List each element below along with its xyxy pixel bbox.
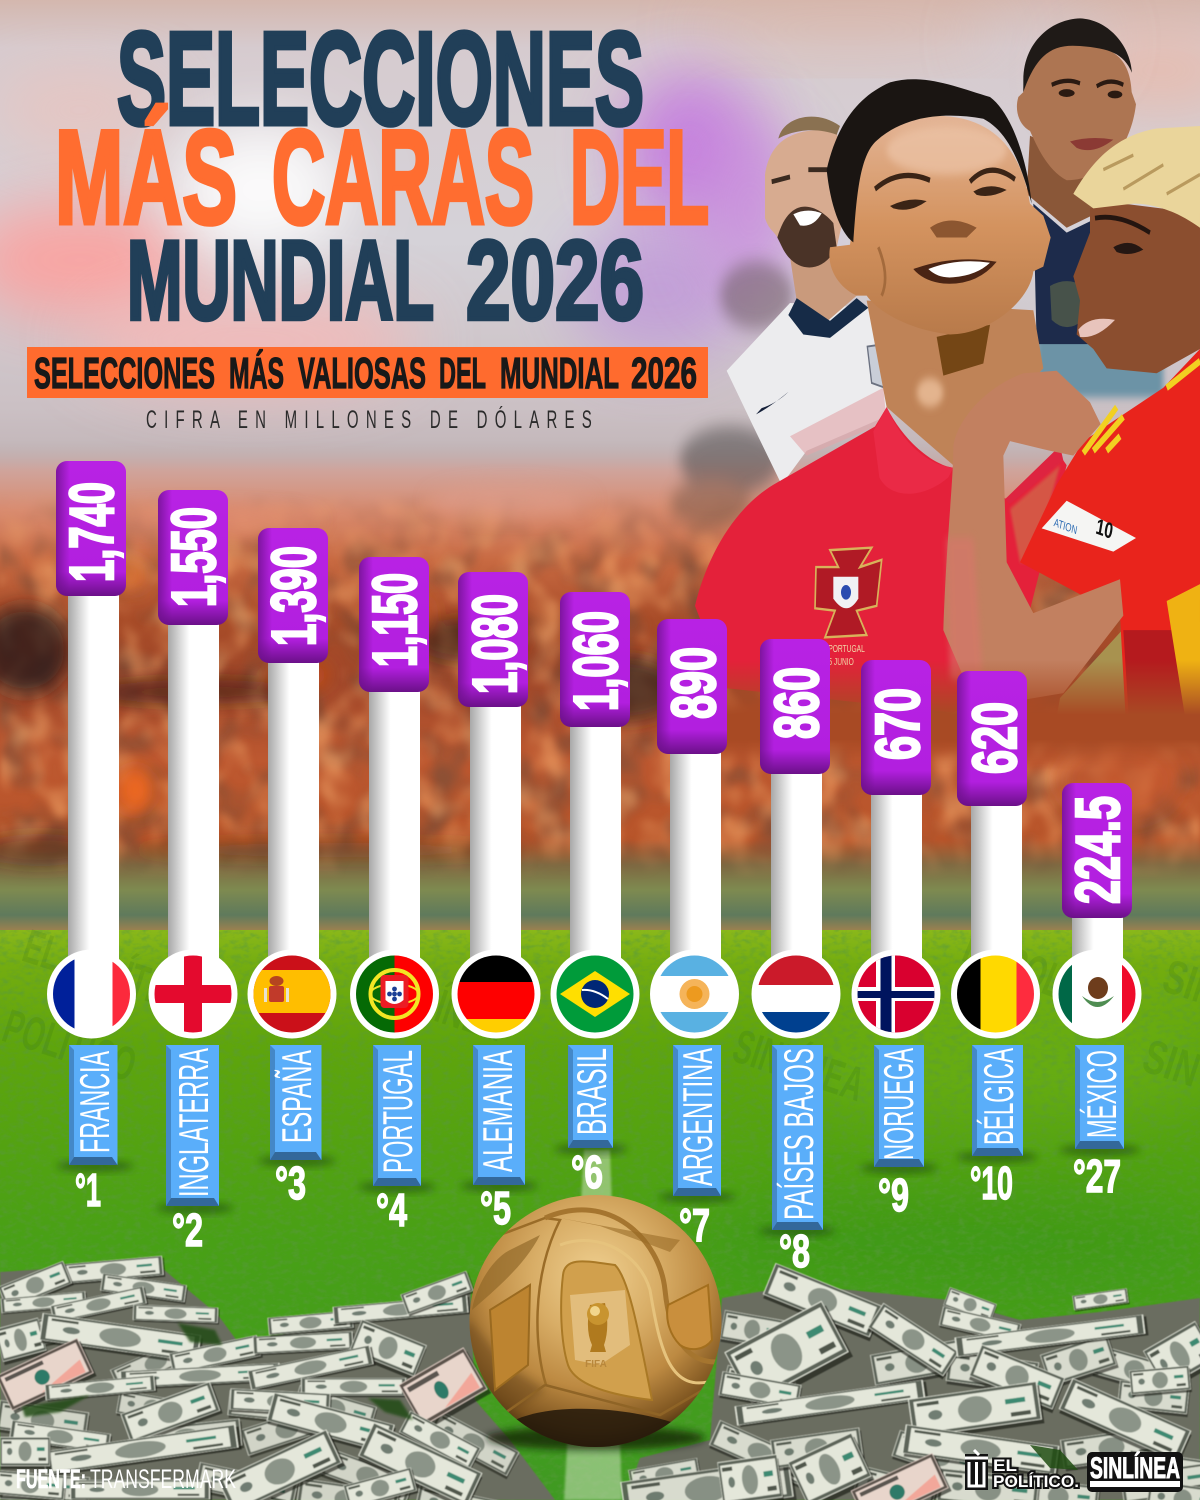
flag: Argentina: [650, 950, 739, 1038]
bar: México: 224.5: [1064, 796, 1133, 904]
subtitle banner: [27, 347, 708, 398]
bar chart: [56, 461, 1133, 960]
player: Ronaldo: [827, 79, 1051, 465]
dark smoke behind players: [670, 262, 793, 528]
title: [55, 5, 709, 343]
country labels: [57, 1045, 1140, 1237]
logo: El Político: POLÍTICO.: [993, 1472, 1079, 1491]
logo: Sinlínea: [1087, 1451, 1183, 1492]
background: blurred stadium crowd: [0, 440, 1200, 940]
label: Países Bajos: PAÍSES BAJOS: [775, 1048, 822, 1220]
subtitle banner: VALIOSAS: [298, 349, 426, 398]
background: grass pitch: EL POLÍTICO: [956, 921, 1143, 1038]
title line: MÁS CARAS DEL: MÁS: [55, 104, 237, 252]
subtitle banner: DEL: [439, 349, 486, 398]
source credit: FUENTE:: [16, 1464, 86, 1494]
label: Noruega: NORUEGA: [875, 1048, 922, 1160]
trophy on ball: [587, 1303, 609, 1352]
title line: MÁS CARAS DEL: CARAS: [272, 104, 534, 252]
flag: Francia: [47, 950, 136, 1038]
label: España: ESPAÑA: [273, 1050, 320, 1143]
source credit: [16, 1464, 236, 1494]
bar: México: [1062, 783, 1133, 960]
background: grass pitch: EL POLÍTICO: [17, 920, 205, 1026]
label: Inglaterra: [157, 1045, 233, 1214]
under layer of bills: [620, 1310, 1200, 1500]
rank 2: °2: [172, 1204, 203, 1256]
flag: México: [1052, 950, 1142, 1038]
golden football: FIFA: [585, 1359, 607, 1370]
bar: Francia: 1,740: [58, 482, 127, 582]
subtitle banner: 2026: [631, 349, 697, 398]
rank 1: °1: [75, 1164, 101, 1216]
golden football: [450, 1195, 730, 1450]
subtitle banner: MÁS: [229, 348, 284, 398]
subtitle banner: MUNDIAL: [500, 349, 619, 398]
jersey: Portugal red shirt with crest: [695, 407, 1067, 713]
title line: MUNDIAL 2026: MUNDIAL: [127, 218, 434, 343]
bar: Bélgica: 620: [961, 702, 1030, 774]
crowd fade over players: [690, 660, 1200, 770]
title line: SELECCIONES: SELECCIONES: [117, 5, 644, 152]
unit note: CIFRA EN MILLONES DE DÓLARES: [146, 406, 592, 434]
bar: Alemania: 1,080: [461, 594, 530, 694]
jersey: Portugal red shirt with crest: PORTUGAL: [828, 643, 865, 654]
player: Yamal: ATION: [1053, 517, 1078, 538]
label: México: MÉXICO: [1078, 1050, 1125, 1138]
label: Países Bajos: [759, 1045, 835, 1237]
bar: Portugal: [359, 557, 430, 960]
flags row: [47, 950, 1142, 1038]
bar: Inglaterra: [158, 490, 229, 960]
rank 7: °7: [679, 1199, 710, 1251]
flag: Brasil: [550, 950, 640, 1038]
flag: Bélgica: [951, 950, 1040, 1038]
title line: MÁS CARAS DEL: [55, 104, 709, 252]
label: Portugal: [359, 1045, 435, 1193]
bar: Argentina: 890: [660, 647, 729, 719]
pile of dollar bills: right: [620, 1263, 1200, 1500]
bar: Brasil: 1,060: [562, 611, 631, 711]
background: grass pitch: [0, 920, 1200, 1500]
label: Argentina: [659, 1045, 735, 1203]
player: Yamal: [943, 126, 1200, 737]
grass gap in right money pile: [1030, 1445, 1078, 1470]
rank 8: °8: [779, 1225, 810, 1277]
label: Inglaterra: INGLATERRA: [170, 1048, 217, 1197]
subtitle banner: SELECCIONES: [34, 349, 215, 398]
flag: Inglaterra: [148, 950, 238, 1038]
photo: football players: [670, 18, 1200, 737]
title line: MÁS CARAS DEL: DEL: [570, 104, 709, 252]
rank 10: °10: [970, 1157, 1013, 1209]
rank 27: °27: [1073, 1150, 1121, 1202]
label: Bélgica: BÉLGICA: [975, 1048, 1022, 1145]
label: Alemania: ALEMANIA: [474, 1050, 521, 1172]
label: Bélgica: [957, 1045, 1037, 1163]
rank 3: °3: [275, 1157, 306, 1209]
flag: España: [248, 950, 336, 1038]
jersey: Portugal red shirt with crest: 5 JUNIO: [828, 656, 854, 667]
player: Yamal: 10: [1094, 515, 1115, 545]
bar: Francia: [56, 461, 127, 960]
rankings: [75, 1146, 1121, 1277]
bar: España: 1,390: [260, 546, 329, 646]
logo: El Político: EL: [993, 1456, 1017, 1475]
bar: Brasil: [560, 592, 631, 960]
rank 9: °9: [878, 1169, 909, 1221]
bar: Portugal: 1,150: [361, 573, 430, 667]
title line: MUNDIAL 2026: 2026: [466, 218, 644, 343]
rank 5: °5: [480, 1182, 511, 1234]
bar: Inglaterra: 1,550: [160, 507, 229, 607]
logo: El Político: [965, 1450, 1079, 1491]
bar: Bélgica: [957, 671, 1030, 960]
label: Noruega: [861, 1045, 937, 1174]
crest: [815, 548, 882, 637]
olive pitch patch behind arm: [1053, 625, 1130, 737]
flag: Noruega: [852, 950, 940, 1038]
label: España: [259, 1045, 335, 1167]
bar: España: [258, 528, 329, 960]
label: Alemania: [461, 1045, 537, 1192]
label: México: [1060, 1045, 1140, 1156]
bar: Noruega: 670: [864, 688, 933, 760]
flag: Alemania: [452, 950, 540, 1038]
label: Francia: [57, 1045, 133, 1172]
flag: Portugal: [350, 950, 439, 1038]
player: Kane: [727, 117, 890, 485]
label: Brasil: [555, 1045, 627, 1155]
under layer of bills: [0, 1317, 521, 1500]
label: Francia: FRANCIA: [71, 1051, 118, 1153]
pile of dollar bills: left: [0, 1256, 555, 1500]
label: Argentina: ARGENTINA: [674, 1048, 721, 1186]
rank 6: °6: [571, 1146, 603, 1198]
bar: Argentina: [657, 619, 729, 960]
bar: Alemania: [458, 572, 530, 960]
background: sky and smoke: [0, 0, 1200, 480]
label: Brasil: BRASIL: [568, 1048, 615, 1135]
rank 4: °4: [376, 1184, 407, 1236]
bar: Países Bajos: 860: [763, 667, 832, 739]
label: Portugal: PORTUGAL: [374, 1050, 421, 1173]
player: Mbappe: [1017, 18, 1163, 397]
flag: Países Bajos: [752, 950, 840, 1038]
background: grass pitch: POLÍTICO: [0, 1000, 142, 1092]
bar: Noruega: [861, 660, 933, 960]
background: grass pitch: SINLÍNEA: [727, 1020, 871, 1112]
grass gaps in left money pile: [22, 1323, 413, 1420]
bar: Países Bajos: [760, 639, 832, 960]
background: grass pitch: SINLÍNEA: [367, 960, 511, 1052]
source credit: TRANSFERMARK: [90, 1464, 236, 1494]
